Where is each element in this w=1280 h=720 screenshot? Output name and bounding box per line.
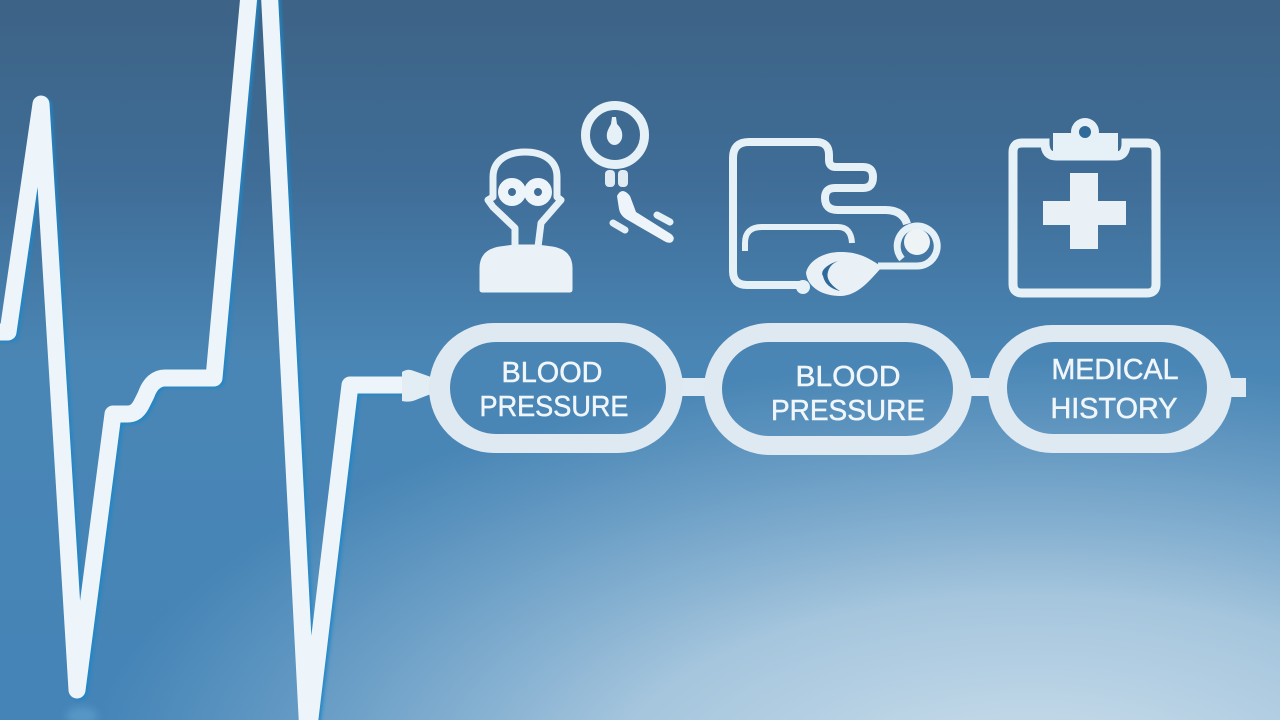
step 2: blood pressure pill: [704, 323, 972, 455]
icon: person with glasses: [482, 152, 570, 290]
step 2: blood pressure pill: BLOOD: [796, 361, 900, 393]
step 3: medical history pill: HISTORY: [1050, 393, 1178, 425]
step 3: medical history pill: [988, 325, 1232, 453]
heartbeat line: [0, 0, 428, 720]
connector valve: [402, 370, 431, 402]
step 1: blood pressure pill: PRESSURE: [480, 391, 628, 423]
step 3: medical history pill: MEDICAL: [1052, 354, 1178, 386]
step 2: blood pressure pill: PRESSURE: [771, 395, 925, 427]
floor reflection: [66, 707, 98, 720]
icon: medical clipboard: [1013, 118, 1156, 293]
icon: pressure gauge and arm: [586, 106, 674, 243]
step 1: blood pressure pill: [429, 323, 683, 453]
icon: blood pressure cuff: [733, 142, 937, 296]
connector bars: [680, 378, 1246, 397]
step 1: blood pressure pill: BLOOD: [502, 357, 602, 389]
